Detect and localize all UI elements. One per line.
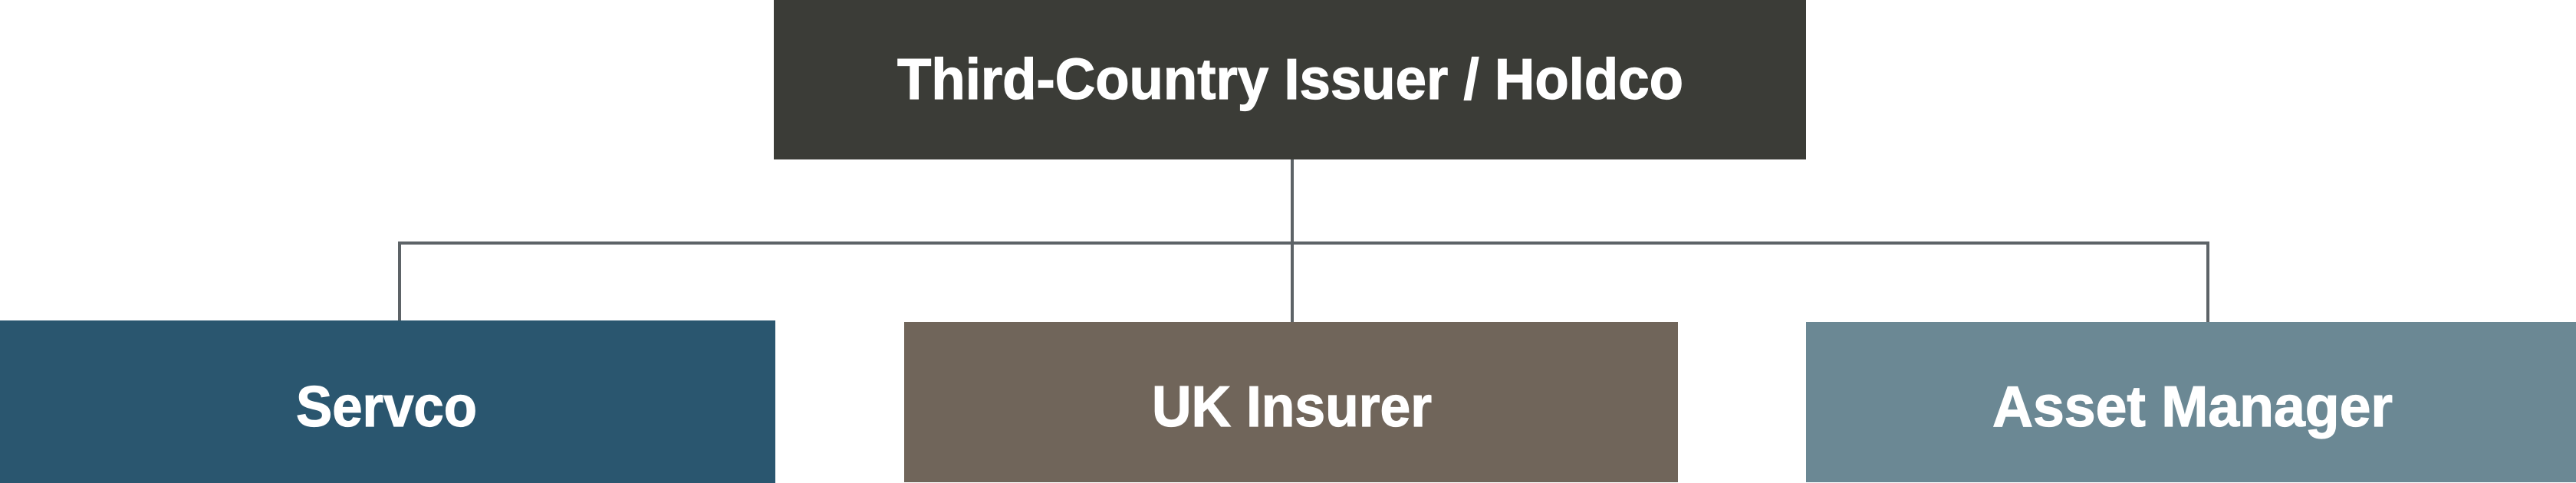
child box: Servco: Servco (296, 374, 477, 439)
child box: UK Insurer: UK Insurer (1152, 374, 1432, 439)
parent box: Third-Country Issuer / Holdco: Third-Country Issuer / Holdco (897, 47, 1683, 111)
child box: Asset Manager: Asset Manager (1992, 374, 2393, 439)
child box: UK Insurer (904, 322, 1678, 482)
child box: Asset Manager (1806, 322, 2576, 482)
child box: Servco (0, 320, 775, 483)
connector lines (398, 159, 2209, 323)
parent box: Third-Country Issuer / Holdco (774, 0, 1806, 159)
